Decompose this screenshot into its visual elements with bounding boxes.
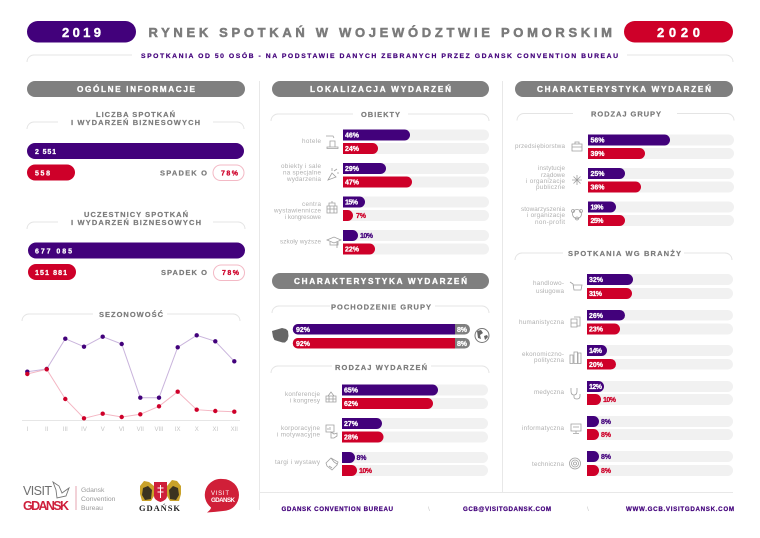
row: centra wystawiennicze: centra	[302, 201, 321, 208]
bar: spotkania 2020	[27, 164, 75, 180]
line chart: sezonowość: V	[101, 427, 105, 433]
row: konferencje i kongresy: konferencje	[285, 391, 320, 398]
row: medyczna	[534, 381, 733, 405]
line chart: sezonowość: VII	[137, 427, 144, 433]
row: szkoły wyższe	[280, 230, 489, 254]
row: instytucje rządowe: 36%	[590, 184, 605, 192]
bar: uczestnicy 2019: 677 085	[35, 248, 72, 256]
row: medyczna: 12%	[589, 384, 603, 391]
callout: spadek o 78%	[161, 265, 244, 280]
icon: map of poland	[272, 328, 288, 342]
section heading: charakterystyka wydarzeń: CHARAKTERYSTYKA WYDARZEŃ	[294, 276, 467, 286]
row: handlowo-usługowa: 32%	[589, 277, 604, 284]
heading: liczba spotkań: LICZBA SPOTKAŃ	[96, 110, 175, 119]
heading: liczba spotkań: I WYDARZEŃ BIZNESOWYCH	[71, 118, 200, 127]
badge: 2019: 2019	[62, 25, 101, 40]
row: obiekty i sale: wydarzenia	[286, 176, 321, 183]
row: przedsiębiorstwa	[515, 134, 734, 159]
section heading: ogólne informacje	[27, 81, 245, 97]
panel: charakterystyka wydarzeń (środek)	[271, 273, 489, 476]
row: przedsiębiorstwa: przedsiębiorstwa	[515, 143, 565, 150]
row: informatyczna: 8%	[601, 419, 612, 426]
row: hotele: 24%	[345, 146, 360, 153]
row: stowarzyszenia: i organizacje	[527, 212, 565, 219]
stacked bars: pochodzenie grupy: 8%	[457, 327, 468, 334]
icon: gear target	[570, 458, 580, 469]
heading: sezonowość: SEZONOWOŚĆ	[99, 310, 164, 319]
row: handlowo-usługowa: 31%	[589, 291, 603, 298]
row: ekonomiczno-polityczna: 14%	[589, 348, 603, 355]
line chart: sezonowość: VIII	[154, 427, 164, 433]
line chart: sezonowość: III	[63, 427, 68, 433]
row: obiekty i sale	[281, 163, 489, 188]
row: korporacyjne i motywacyjne: 27%	[344, 421, 359, 428]
row: konferencje i kongresy: i kongresy	[290, 398, 321, 404]
bar: uczestnicy 2019	[28, 242, 245, 258]
row: instytucje rządowe: 25%	[590, 171, 605, 178]
section heading: charakterystyka wydarzeń	[515, 81, 733, 97]
row: szkoły wyższe: szkoły wyższe	[280, 238, 321, 246]
bar: spotkania 2020: 558	[35, 170, 50, 178]
subtitle: SPOTKANIA OD 50 OSÓB - NA PODSTAWIE DANYCH ZEBRANYCH PRZEZ GDANSK CONVENTION BUREAU	[141, 51, 618, 60]
heading: rodzaj wydarzeń: RODZAJ WYDARZEŃ	[335, 363, 427, 372]
row: korporacyjne i motywacyjne: korporacyjne	[281, 425, 320, 432]
section heading: ogólne informacje: OGÓLNE INFORMACJE	[77, 83, 196, 94]
row: szkoły wyższe: 10%	[360, 233, 374, 240]
row: handlowo-usługowa	[533, 274, 733, 299]
icon: handshake	[326, 458, 338, 470]
bar: spotkania 2019: 2 551	[35, 149, 56, 156]
row: techniczna	[532, 451, 733, 476]
row: instytucje rządowe: publiczne	[536, 184, 565, 191]
row: informatyczna: 8%	[601, 432, 612, 439]
row: medyczna: medyczna	[534, 389, 564, 396]
logo: visit gdansk convention bureau: VISIT	[23, 484, 52, 498]
heading: uczestnicy spotkań: UCZESTNICY SPOTKAŃ	[84, 210, 188, 219]
row: informatyczna	[522, 416, 733, 440]
row: przedsiębiorstwa: 56%	[590, 138, 605, 144]
section heading: charakterystyka wydarzeń	[272, 273, 489, 289]
row: instytucje rządowe: i organizacje	[526, 178, 565, 185]
row: obiekty i sale: obiekty i sale	[281, 163, 321, 170]
row: konferencje i kongresy: 65%	[344, 388, 359, 394]
row: obiekty i sale: 47%	[345, 180, 360, 186]
icon: shopping cart	[570, 282, 582, 290]
stacked bars: pochodzenie grupy: 92%	[296, 341, 311, 348]
row: targi i wystawy: 8%	[356, 455, 367, 462]
icon: hand with chart	[326, 425, 337, 438]
row: obiekty i sale: 29%	[345, 166, 360, 173]
row: instytucje rządowe	[526, 165, 734, 192]
icon: party popper	[328, 168, 339, 180]
icon: graduation cap	[327, 237, 341, 248]
icon: conference	[326, 392, 336, 402]
logo: visit gdansk speech bubble: GDANSK	[211, 497, 236, 504]
line chart: sezonowość: IV	[81, 427, 87, 433]
row: hotele: 46%	[345, 132, 360, 140]
row: przedsiębiorstwa: 39%	[590, 151, 605, 158]
heading: rodzaj grupy: RODZAJ GRUPY	[591, 110, 661, 118]
row: stowarzyszenia	[521, 202, 734, 226]
row: instytucje rządowe: rządowe	[541, 172, 565, 179]
header	[27, 21, 733, 60]
logo: visit gdansk speech bubble	[205, 479, 239, 512]
logo: visit gdansk convention bureau: GDANSK	[23, 499, 69, 513]
heading: pochodzenie grupy: POCHODZENIE GRUPY	[331, 302, 431, 312]
heading: obiekty: OBIEKTY	[361, 110, 400, 119]
row: centra wystawiennicze: wystawiennicze	[273, 208, 321, 214]
panel: charakterystyka wydarzeń (prawa)	[515, 81, 734, 476]
row: techniczna: 8%	[601, 468, 612, 475]
callout: spadek o 78%: 78%	[221, 170, 239, 178]
section heading: lokalizacja wydarzeń: LOKALIZACJA WYDARZEŃ	[310, 84, 451, 94]
bar: uczestnicy 2020	[28, 264, 76, 280]
heading: spotkania wg branży: SPOTKANIA WG BRANŻY	[568, 249, 681, 258]
logo: visit gdansk convention bureau	[23, 482, 116, 513]
heading: uczestnicy spotkań	[71, 210, 201, 227]
row: szkoły wyższe: 22%	[345, 246, 360, 254]
row: ekonomiczno-polityczna	[522, 345, 733, 370]
row: instytucje rządowe: instytucje	[538, 165, 565, 172]
stacked bars: pochodzenie grupy: 8%	[457, 341, 468, 348]
line chart: sezonowość: X	[195, 427, 199, 433]
row: konferencje i kongresy: 62%	[344, 401, 359, 408]
line chart: sezonowość: VI	[119, 427, 125, 433]
footer contacts: WWW.GCB.VISITGDANSK.COM	[626, 506, 734, 513]
line chart: sezonowość: II	[45, 427, 49, 433]
badge: 2019	[27, 21, 136, 42]
row: centra wystawiennicze: 7%	[356, 213, 367, 220]
footer contacts: \	[428, 506, 430, 513]
row: targi i wystawy: 10%	[359, 468, 373, 475]
footer contacts: \	[587, 506, 589, 513]
icon: exhibition centre	[327, 201, 337, 213]
row: korporacyjne i motywacyjne: i motywacyjne	[277, 432, 320, 438]
footer contacts: GDANSK CONVENTION BUREAU	[282, 506, 394, 513]
row: stowarzyszenia: non-profit	[535, 219, 565, 226]
icon: hotel bell	[326, 136, 338, 148]
row: medyczna: 10%	[603, 397, 617, 404]
row: korporacyjne i motywacyjne	[277, 418, 488, 442]
heading: liczba spotkań	[71, 110, 200, 127]
row: targi i wystawy: targi i wystawy	[275, 459, 321, 466]
row: obiekty i sale: na specjalne	[283, 170, 321, 176]
row: stowarzyszenia: 19%	[590, 204, 604, 212]
logo: visit gdansk convention bureau: Bureau	[81, 505, 103, 512]
line chart: sezonowość	[22, 333, 240, 433]
stacked bars: pochodzenie grupy: 92%	[296, 327, 311, 334]
row: stowarzyszenia: 25%	[590, 218, 604, 225]
stacked bars: pochodzenie grupy	[293, 324, 470, 348]
row: korporacyjne i motywacyjne: 28%	[344, 434, 359, 442]
title: RYNEK SPOTKAŃ W WOJEWÓDZTWIE POMORSKIM	[148, 25, 612, 40]
row: humanistyczna: 26%	[589, 313, 604, 320]
row: informatyczna: informatyczna	[522, 425, 564, 432]
bar: spotkania 2019	[27, 143, 244, 159]
line chart: sezonowość: IX	[175, 427, 181, 433]
footer contacts	[282, 506, 734, 513]
badge: 2020	[624, 21, 733, 42]
footer contacts: GCB@VISITGDANSK.COM	[463, 506, 551, 513]
section heading: lokalizacja wydarzeń	[272, 81, 489, 97]
row: konferencje i kongresy	[285, 384, 488, 409]
row: ekonomiczno-polityczna: polityczna	[534, 357, 564, 364]
row: ekonomiczno-polityczna: ekonomiczno-	[522, 351, 564, 358]
row: handlowo-usługowa: handlowo-	[533, 280, 564, 287]
row: humanistyczna: 23%	[589, 326, 604, 334]
row: ekonomiczno-polityczna: 20%	[589, 362, 604, 369]
icon: people circle	[572, 210, 582, 220]
logo: gdańsk crest: GDAŃSK	[139, 503, 180, 513]
icon: network	[572, 175, 582, 185]
logo: visit gdansk convention bureau: Gdansk	[81, 487, 105, 494]
icon: briefcase	[572, 142, 582, 151]
panel: lokalizacja wydarzeń	[271, 81, 489, 254]
line chart: sezonowość: XII	[231, 427, 238, 433]
row: humanistyczna: humanistyczna	[519, 319, 564, 326]
row: hotele: hotele	[302, 138, 321, 145]
badge: 2020: 2020	[657, 25, 700, 40]
line chart: sezonowość: XI	[212, 427, 218, 433]
logo: visit gdansk speech bubble: VISIT	[211, 491, 229, 497]
row: techniczna: 8%	[601, 454, 612, 461]
icon: books	[571, 317, 580, 327]
row: humanistyczna	[519, 310, 733, 334]
row: centra wystawiennicze: 15%	[345, 200, 359, 206]
line chart: sezonowość: I	[26, 427, 28, 433]
panel: ogólne informacje	[22, 81, 245, 433]
callout: spadek o 78%	[160, 165, 244, 180]
row: hotele	[302, 130, 489, 154]
callout: spadek o 78%: SPADEK O	[161, 268, 207, 277]
row: centra wystawiennicze: i kongresowe	[285, 214, 321, 221]
logo: gdańsk crest	[139, 480, 181, 513]
row: techniczna: techniczna	[532, 461, 564, 468]
bar: uczestnicy 2020: 151 881	[35, 270, 67, 277]
section heading: charakterystyka wydarzeń: CHARAKTERYSTYKA WYDARZEŃ	[537, 84, 711, 94]
logo: visit gdansk convention bureau: Convention	[81, 496, 116, 503]
icon: monitor	[571, 424, 581, 434]
row: centra wystawiennicze	[273, 196, 489, 221]
row: stowarzyszenia: stowarzyszenia	[521, 206, 565, 213]
callout: spadek o 78%: SPADEK O	[160, 168, 207, 178]
icon: city buildings	[570, 352, 581, 364]
icon: globe	[475, 328, 489, 342]
callout: spadek o 78%: 78%	[222, 270, 240, 277]
row: handlowo-usługowa: usługowa	[536, 288, 564, 295]
icon: stethoscope	[571, 388, 580, 399]
row: targi i wystawy	[275, 452, 488, 476]
heading: uczestnicy spotkań: I WYDARZEŃ BIZNESOWYCH	[71, 218, 201, 227]
